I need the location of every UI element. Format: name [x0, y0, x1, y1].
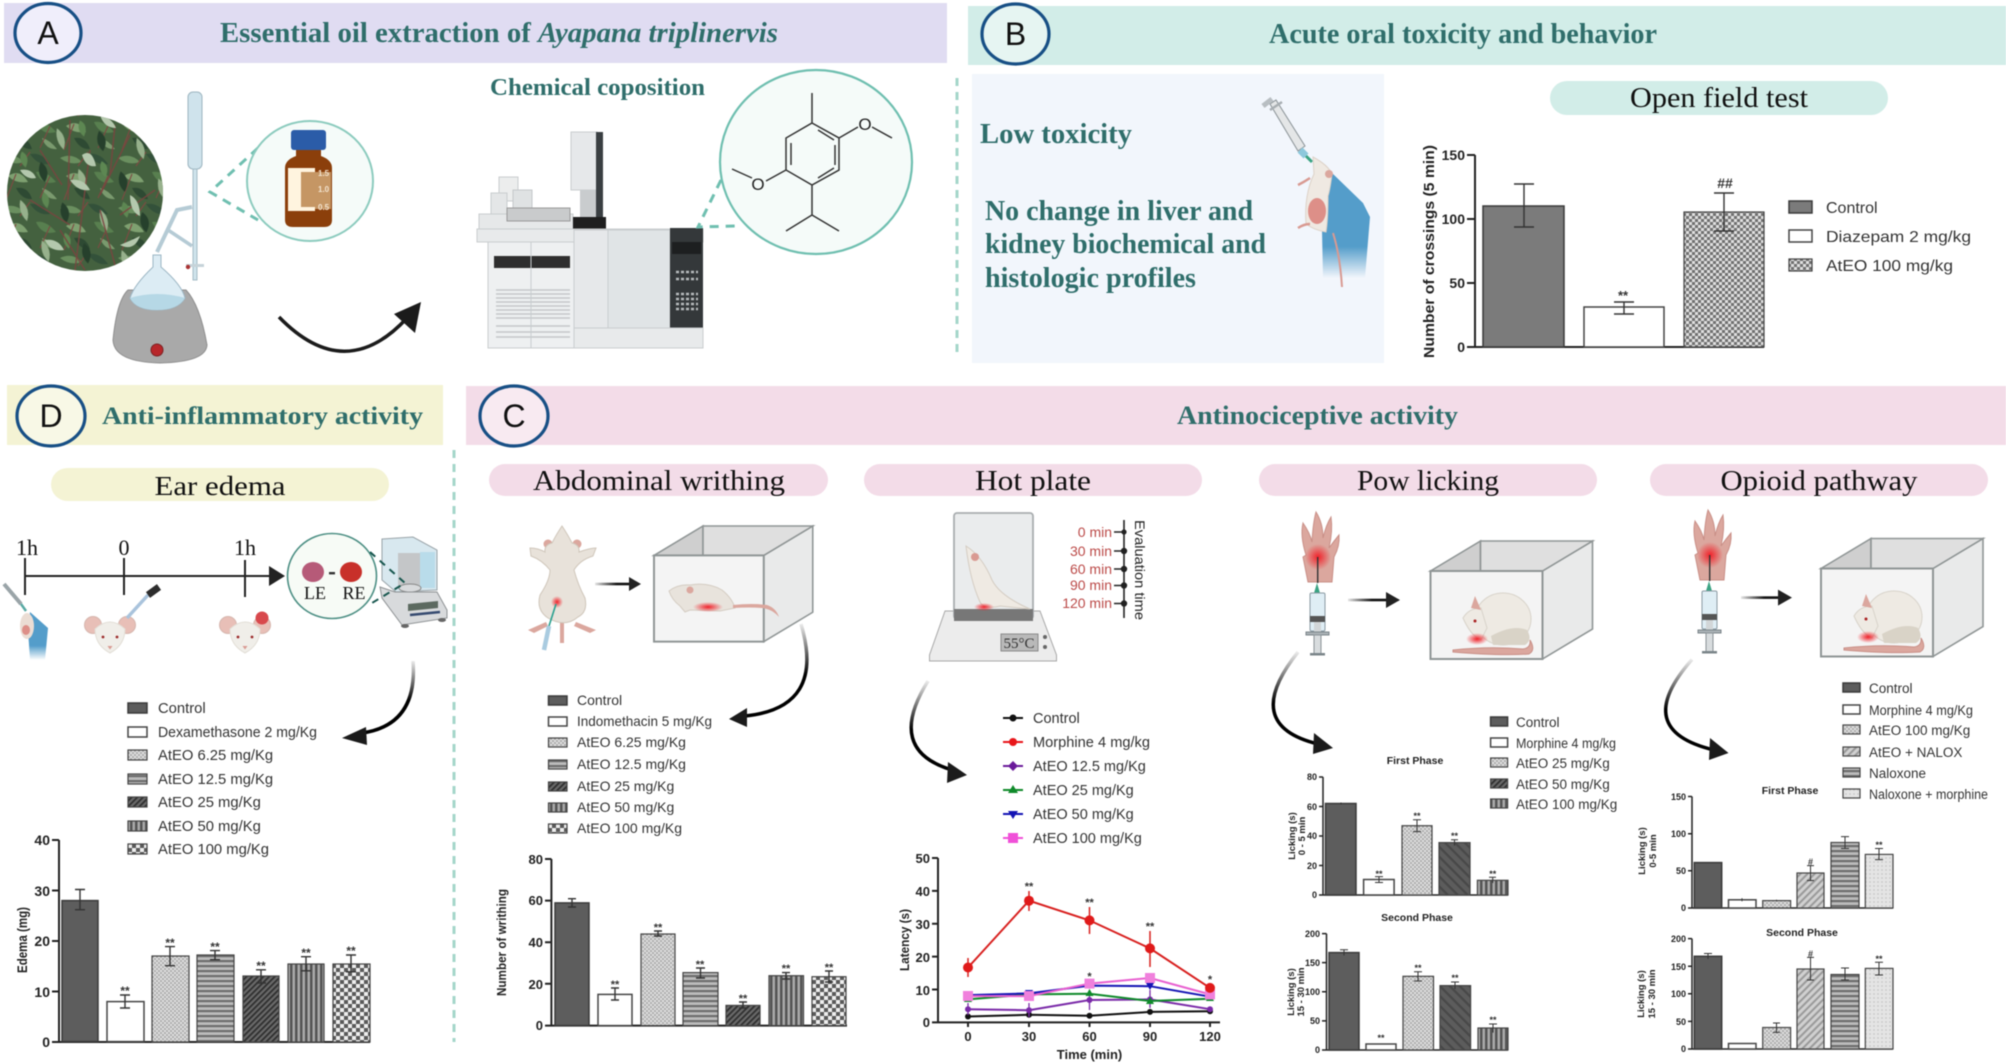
callout circle: molecule structure: O — [858, 115, 872, 134]
curved arrow to chart — [1273, 652, 1333, 754]
line chart: latency over time: 20 — [916, 950, 930, 965]
legend: ear edema: AtEO 25 mg/Kg — [158, 795, 261, 811]
bar chart: paw licking first phase: 20 — [1307, 861, 1317, 871]
evaluation time scale: 120 min — [1062, 595, 1112, 611]
bar chart: paw licking first phase: ** — [1489, 869, 1497, 879]
badge B: B — [1005, 16, 1026, 52]
icon: gavage at timeline start — [4, 584, 48, 660]
callout lines to balance — [370, 552, 405, 603]
timeline: 0 — [118, 535, 130, 560]
bar chart: writhing: 40 — [529, 935, 543, 950]
bar chart: writhing: ** — [782, 963, 791, 975]
badge D — [17, 386, 85, 446]
legend: ear edema: AtEO 100 mg/Kg — [158, 842, 269, 858]
legend: paw licking: Morphine 4 mg/kg — [1516, 736, 1616, 751]
bar chart: paw licking second phase: 0 — [1315, 1045, 1320, 1055]
bar chart: paw licking first phase: ** — [1375, 869, 1383, 879]
legend: ear edema — [128, 701, 317, 858]
bar chart: paw licking first phase — [1287, 755, 1508, 900]
line chart: latency over time: Time (min) — [1057, 1047, 1122, 1062]
pill heading: pow licking — [1259, 464, 1597, 497]
text: no change in biochemical profiles — [985, 196, 1266, 294]
callout: LE minus RE — [288, 534, 376, 618]
evaluation time scale: 0 min — [1078, 524, 1112, 540]
legend: ear edema: AtEO 6.25 mg/Kg — [158, 748, 273, 764]
legend: latency: Morphine 4 mg/kg — [1033, 735, 1150, 751]
panel C title: Antinociceptive activity — [1177, 401, 1458, 430]
bar chart: paw licking second phase: ** — [1414, 963, 1422, 973]
line chart: latency over time: 120 — [1199, 1029, 1221, 1044]
legend: paw licking: AtEO 100 mg/Kg — [1516, 797, 1617, 812]
bar chart: opioid second phase: 0 — [1681, 1044, 1686, 1054]
bar chart: edema — [14, 832, 370, 1050]
pill heading: ear edema: Ear edema — [154, 471, 286, 501]
bar chart: opioid second phase: 50 — [1676, 1017, 1686, 1027]
series: AtEO 25 — [964, 989, 1214, 1004]
legend: open field test: Control — [1826, 200, 1878, 217]
pill heading: pow licking: Pow licking — [1357, 466, 1499, 497]
legend: latency: AtEO 12.5 mg/Kg — [1033, 759, 1146, 775]
pill heading: abdominal writhing: Abdominal writhing — [533, 466, 785, 497]
legend: writhing: AtEO 100 mg/Kg — [577, 820, 682, 836]
panel A title: Essential oil extraction of Ayapana triplinervis — [220, 17, 778, 49]
bar chart: open field crossings: 50 — [1449, 275, 1465, 291]
legend: writhing: AtEO 50 mg/Kg — [577, 799, 674, 815]
panel D header banner — [7, 385, 443, 445]
legend: latency: AtEO 50 mg/Kg — [1033, 807, 1134, 823]
bar chart: open field crossings: Number of crossings (5 min) — [1421, 145, 1438, 358]
bar chart: opioid second phase: 15 - 30 min — [1647, 969, 1658, 1019]
text: no change in biochemical profiles: No change in liver and — [985, 196, 1253, 227]
line chart: latency over time: ** — [1146, 921, 1155, 933]
bar chart: paw licking second phase: 50 — [1310, 1016, 1320, 1026]
legend: latency: AtEO 100 mg/Kg — [1033, 831, 1142, 847]
arrow — [595, 577, 641, 591]
curved arrow to chart — [729, 624, 807, 727]
series: morphine — [963, 891, 1215, 993]
pill heading: abdominal writhing — [489, 464, 828, 497]
bar chart: paw licking second phase: 150 — [1305, 958, 1320, 968]
callout circle: oil bottle: 1.5 — [318, 169, 330, 178]
bar chart: opioid first phase: 150 — [1671, 792, 1686, 802]
icon: mouse with inflamed ear — [220, 612, 270, 653]
text: low toxicity: Low toxicity — [980, 119, 1132, 150]
line chart: latency over time: 10 — [916, 983, 930, 998]
line chart: latency over time: 0 — [923, 1015, 930, 1030]
bar chart: paw licking first phase: Licking (s) — [1287, 812, 1298, 860]
bar chart: open field crossings: ## — [1717, 175, 1733, 191]
callout circle: molecule structure: O — [751, 175, 765, 194]
panel A: essential oil extraction — [4, 3, 947, 363]
bar chart: open field crossings: 100 — [1442, 211, 1465, 227]
bar chart: edema: ** — [165, 936, 175, 950]
callout circle: oil bottle: 1.0 — [318, 185, 330, 194]
badge C — [480, 386, 548, 446]
legend: paw licking: AtEO 25 mg/Kg — [1516, 756, 1610, 771]
legend: ear edema: AtEO 12.5 mg/Kg — [158, 772, 273, 788]
bar chart: writhing — [494, 852, 847, 1033]
pill heading: open field test — [1550, 81, 1888, 115]
line chart: latency over time: ** — [1085, 897, 1094, 909]
bar chart: paw licking second phase — [1286, 912, 1508, 1055]
line chart: latency over time: 40 — [916, 884, 930, 899]
line chart: latency over time: 30 — [1022, 1029, 1036, 1044]
legend: writhing: Indomethacin 5 mg/Kg — [577, 713, 712, 729]
bar chart: opioid second phase — [1636, 927, 1893, 1054]
bar chart: paw licking first phase: 40 — [1307, 831, 1317, 841]
bar chart: paw licking second phase: 15 - 30 min — [1296, 967, 1307, 1017]
panel A header banner — [4, 3, 947, 63]
line chart: latency over time: 0 — [964, 1029, 972, 1044]
timeline: 1h — [234, 535, 256, 560]
legend: writhing: AtEO 12.5 mg/Kg — [577, 756, 686, 772]
bar chart: writhing: 60 — [529, 893, 543, 908]
bar chart: paw licking second phase: 100 — [1305, 987, 1320, 997]
bar chart: opioid first phase: First Phase — [1762, 785, 1818, 797]
line chart: latency over time: ** — [1025, 881, 1034, 893]
legend: opioid pathway: Morphine 4 mg/Kg — [1869, 703, 1973, 718]
panel B: acute toxicity and behavior — [968, 4, 2006, 363]
evaluation time scale: Evaluation time — [1132, 520, 1148, 620]
badge A — [15, 4, 81, 62]
legend: writhing: AtEO 6.25 mg/Kg — [577, 734, 686, 750]
bar chart: writhing: Number of writhing — [494, 889, 509, 996]
pill heading: hot plate: Hot plate — [975, 466, 1091, 497]
bar chart: open field crossings — [1421, 145, 1764, 358]
bar chart: paw licking second phase: Second Phase — [1381, 912, 1453, 924]
bar chart: paw licking second phase: ** — [1489, 1015, 1497, 1025]
legend: opioid pathway — [1843, 681, 1988, 802]
panel C header banner — [466, 386, 2006, 445]
bar chart: edema: 30 — [34, 883, 50, 899]
legend: opioid pathway: AtEO 100 mg/Kg — [1869, 723, 1970, 738]
legend: paw licking — [1491, 715, 1617, 812]
bar chart: paw licking second phase: 200 — [1305, 929, 1320, 939]
legend: open field test: AtEO 100 mg/kg — [1826, 258, 1953, 275]
text: no change in biochemical profiles: histologic profiles — [985, 263, 1196, 294]
icon: injected mouse — [528, 526, 596, 650]
bar chart: opioid second phase: Second Phase — [1766, 927, 1838, 939]
icon: paw injection — [1694, 510, 1731, 654]
legend: writhing: AtEO 25 mg/Kg — [577, 778, 674, 794]
legend: ear edema: AtEO 50 mg/Kg — [158, 819, 261, 835]
legend: latency: Control — [1033, 711, 1080, 727]
icon: GC-MS instrument — [477, 132, 703, 348]
legend: open field test: Diazepam 2 mg/kg — [1826, 229, 1971, 246]
legend: ear edema: Dexamethasone 2 mg/Kg — [158, 725, 317, 741]
column: abdominal writhing — [489, 464, 847, 1033]
bar chart: writhing: 20 — [529, 977, 543, 992]
legend: opioid pathway: Naloxone — [1869, 766, 1926, 781]
heading: chemical composition: Chemical coposition — [490, 75, 705, 101]
curved arrow to chart — [911, 681, 967, 783]
line chart: latency over time: * — [1208, 974, 1213, 986]
legend: opioid pathway: Naloxone + morphine — [1869, 787, 1988, 802]
bar chart: edema: ** — [301, 946, 311, 960]
bar chart: paw licking second phase: ** — [1451, 973, 1459, 983]
timeline: 1h — [16, 535, 38, 560]
column: paw licking — [1259, 464, 1617, 1055]
bar chart: edema: ** — [210, 940, 220, 954]
panel B title: Acute oral toxicity and behavior — [1269, 18, 1657, 50]
bar chart: writhing: ** — [611, 979, 620, 991]
bar chart: opioid first phase: 0-5 min — [1648, 834, 1659, 868]
callout circle: molecule structure — [720, 70, 912, 254]
bar chart: opioid first phase — [1637, 785, 1893, 913]
badge D: D — [39, 398, 63, 434]
bar chart: edema: 20 — [34, 933, 50, 949]
bar chart: writhing: ** — [696, 959, 705, 971]
legend: latency: AtEO 25 mg/Kg — [1033, 783, 1134, 799]
icon: hot plate apparatus — [930, 513, 1056, 661]
bar chart: opioid first phase: ** — [1875, 840, 1883, 850]
arrow — [1348, 592, 1400, 608]
bar chart: opioid second phase: Licking (s) — [1636, 970, 1647, 1018]
legend: latency — [1003, 711, 1150, 847]
divider D/C — [452, 450, 456, 1042]
evaluation time scale — [1062, 520, 1148, 620]
bar chart: paw licking first phase: ** — [1413, 811, 1421, 821]
arrow — [1741, 590, 1792, 606]
line chart: latency over time — [897, 851, 1221, 1062]
line chart: latency over time: 50 — [916, 851, 930, 866]
callout: LE minus RE: RE — [342, 583, 366, 603]
bar chart: opioid second phase: ** — [1875, 954, 1883, 964]
bar chart: paw licking first phase: 60 — [1307, 802, 1317, 812]
bar chart: opioid second phase: 100 — [1671, 989, 1686, 999]
bar chart: paw licking second phase: ** — [1377, 1033, 1385, 1043]
line chart: latency over time: Latency (s) — [897, 909, 912, 971]
pill heading: ear edema — [51, 468, 389, 501]
findings box — [972, 74, 1384, 363]
legend: opioid pathway: Control — [1869, 681, 1913, 696]
bar chart: edema: 40 — [34, 832, 50, 848]
evaluation time scale: 60 min — [1070, 561, 1112, 577]
bar chart: edema: 0 — [42, 1034, 50, 1050]
legend: writhing: Control — [577, 692, 622, 708]
arrow to GC instrument — [279, 302, 421, 351]
legend: paw licking: Control — [1516, 715, 1560, 730]
line chart: latency over time: 30 — [916, 917, 930, 932]
bar chart: open field crossings: 0 — [1457, 339, 1465, 355]
bar chart: opioid second phase: 200 — [1671, 934, 1686, 944]
bar chart: writhing: ** — [654, 922, 663, 934]
bar chart: paw licking first phase: First Phase — [1387, 755, 1443, 767]
panel C: antinociceptive activity — [466, 386, 2006, 1062]
bar chart: open field crossings: 150 — [1442, 147, 1465, 163]
bar chart: edema: 10 — [34, 984, 50, 1000]
line chart: latency over time: 60 — [1082, 1029, 1097, 1044]
icon: analytical balance — [380, 537, 447, 628]
column: hot plate — [864, 464, 1221, 1062]
series: AtEO 12.5 — [965, 990, 1213, 1017]
bar chart: edema: ** — [346, 944, 356, 958]
line chart: latency over time: * — [1087, 971, 1092, 983]
bar chart: opioid first phase: 50 — [1676, 866, 1686, 876]
bar chart: opioid first phase: # — [1808, 857, 1813, 867]
bar chart: writhing: ** — [739, 993, 748, 1005]
badge B — [982, 4, 1049, 64]
pill heading: opioid pathway — [1650, 464, 1988, 497]
callout circle: oil bottle: 0.5 — [318, 203, 330, 212]
pill heading: hot plate — [864, 464, 1202, 497]
evaluation time scale: 90 min — [1070, 577, 1112, 593]
pill heading: opioid pathway: Opioid pathway — [1720, 466, 1918, 497]
icon: distillation apparatus — [113, 92, 207, 363]
badge A: A — [37, 15, 59, 51]
photo: plant — [5, 113, 165, 273]
curved arrow to chart — [1666, 660, 1728, 760]
bar chart: open field crossings: ** — [1618, 288, 1629, 303]
series: AtEO 100 — [963, 973, 1215, 1001]
column: opioid pathway — [1636, 464, 1988, 1054]
evaluation time scale: 30 min — [1070, 543, 1112, 559]
callout lines to molecule — [698, 180, 735, 227]
icon: oral gavage of mouse — [1263, 99, 1370, 287]
bar chart: edema: ** — [256, 959, 266, 973]
panel B header banner — [968, 6, 2006, 65]
pill heading: open field test: Open field test — [1630, 82, 1808, 114]
legend: open field test — [1789, 200, 1971, 275]
callout: LE minus RE: LE — [304, 583, 326, 603]
icon: cage with licking mouse — [1821, 538, 1983, 656]
bar chart: opioid first phase: Licking (s) — [1637, 827, 1648, 875]
icon: paw injection — [1302, 512, 1339, 656]
bar chart: writhing: 80 — [529, 852, 543, 867]
series: control — [965, 1008, 1213, 1020]
icon: cage with mouse — [654, 526, 813, 642]
legend: paw licking: AtEO 50 mg/Kg — [1516, 777, 1610, 792]
panel D: anti-inflammatory activity — [4, 385, 447, 1050]
badge C: C — [502, 398, 526, 434]
bar chart: paw licking first phase: ** — [1451, 831, 1458, 841]
bar chart: opioid second phase: 150 — [1671, 962, 1686, 972]
icon: mouse with dropper — [84, 587, 159, 653]
callout lines to bottle — [210, 148, 258, 220]
bar chart: opioid first phase: 100 — [1671, 829, 1686, 839]
curved arrow to chart — [342, 661, 413, 745]
legend: ear edema: Control — [158, 701, 206, 717]
series: AtEO 50 — [964, 982, 1214, 1000]
icon: hot plate apparatus: 55°C — [1003, 636, 1035, 652]
bar chart: edema: ** — [120, 984, 130, 998]
timeline — [16, 535, 285, 597]
text: no change in biochemical profiles: kidney biochemical and — [985, 229, 1266, 260]
callout circle: oil bottle — [247, 121, 373, 241]
bar chart: writhing: ** — [825, 962, 834, 974]
bar chart: paw licking first phase: 0 - 5 min — [1297, 817, 1308, 855]
icon: cage with licking mouse — [1430, 541, 1592, 659]
bar chart: paw licking first phase: 0 — [1312, 890, 1317, 900]
bar chart: opioid first phase: 0 — [1681, 903, 1686, 913]
bar chart: paw licking second phase: Licking (s) — [1286, 968, 1297, 1016]
line chart: latency over time: 90 — [1143, 1029, 1157, 1044]
panel D title: Anti-inflammatory activity — [102, 403, 424, 430]
bar chart: opioid second phase: # — [1808, 949, 1813, 959]
bar chart: edema: Edema (mg) — [14, 907, 30, 973]
divider A/B — [956, 78, 958, 358]
legend: opioid pathway: AtEO + NALOX — [1869, 745, 1962, 760]
legend: writhing — [548, 692, 712, 836]
bar chart: paw licking first phase: 80 — [1307, 772, 1317, 782]
bar chart: writhing: 0 — [536, 1018, 543, 1033]
